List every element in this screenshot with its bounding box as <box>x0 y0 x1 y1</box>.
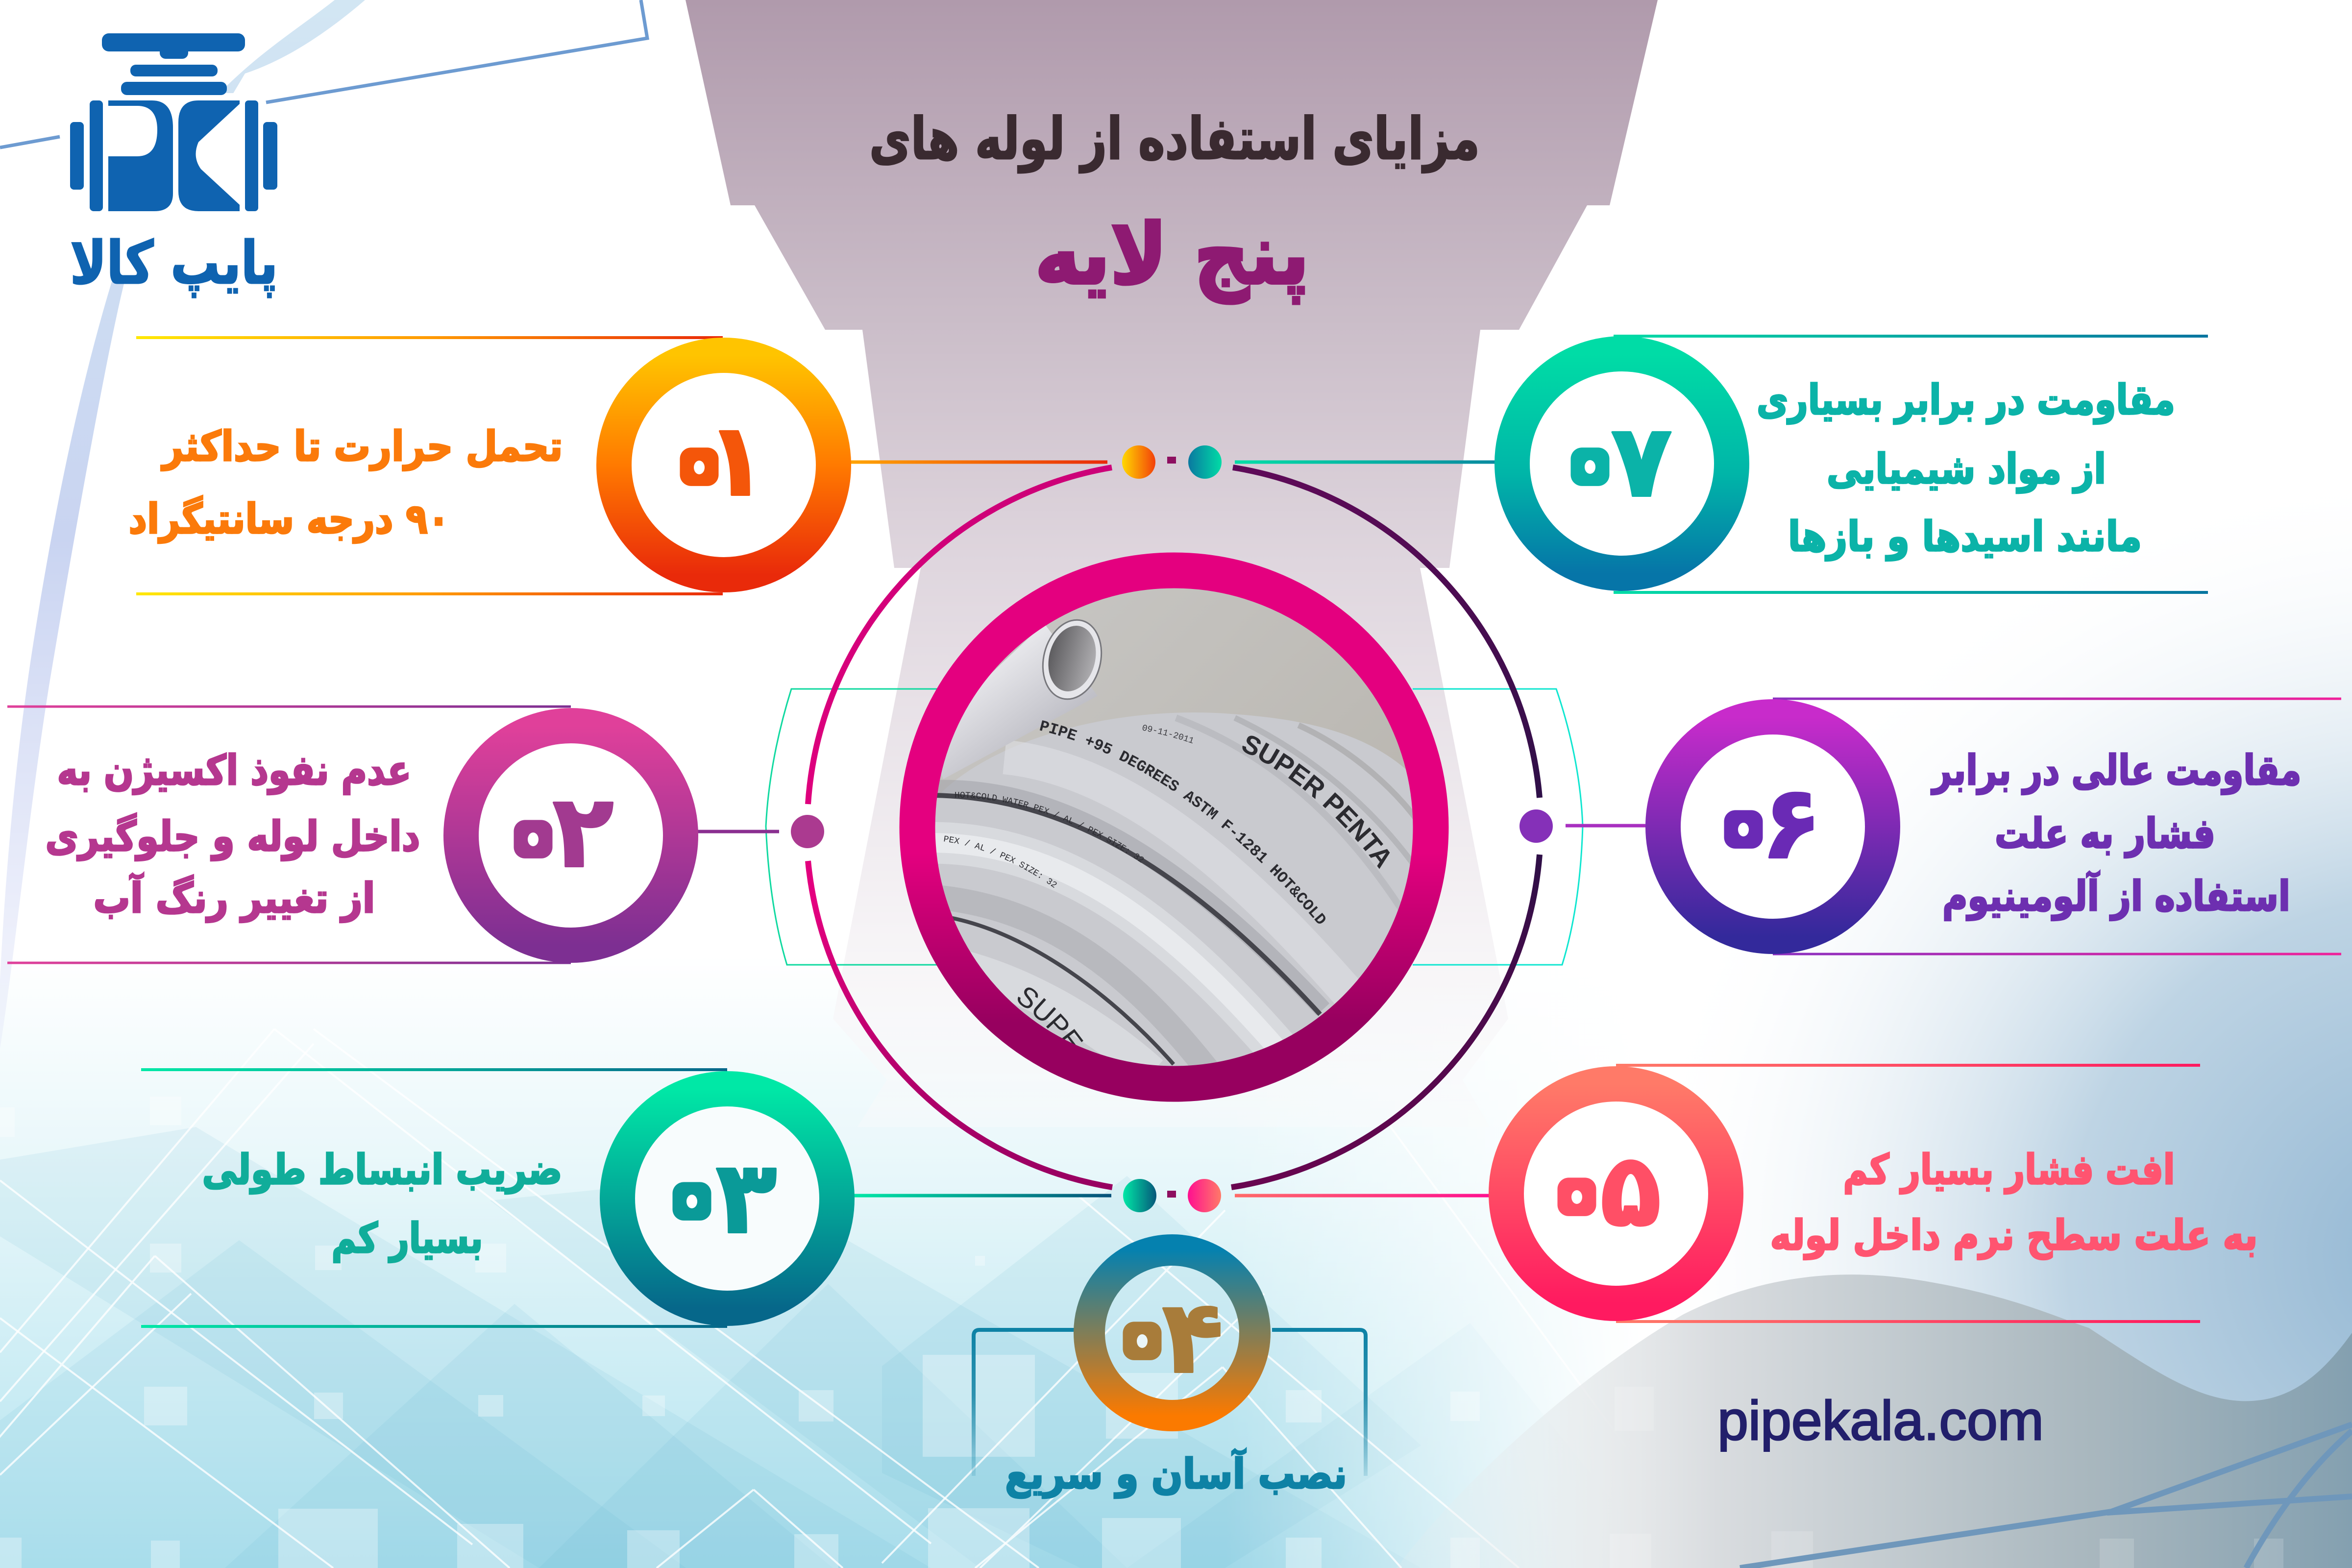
text 06: فشار به علت <box>1995 809 2215 858</box>
number 07: ۷ <box>1611 403 1672 520</box>
text 01 <box>129 422 563 543</box>
printing on pipes <box>944 720 1390 1045</box>
ring dots <box>791 445 1553 1212</box>
top-left lines <box>0 0 647 147</box>
panel: right blue glow <box>1494 368 2352 1568</box>
grey wave <box>1396 1274 2352 1568</box>
item 06 <box>1663 699 2341 954</box>
text 05: افت فشار بسیار کم <box>1843 1146 2175 1194</box>
printing on pipes: 09-11-2011 <box>1143 725 1193 744</box>
number 02: ۲ <box>552 774 614 890</box>
number 07: ۰ <box>1562 407 1618 515</box>
central photo: pipe coil <box>935 588 1413 1066</box>
text 07: از مواد شیمیایی <box>1827 445 2106 493</box>
printing on pipes: SUPER PENTA <box>1243 736 1390 869</box>
text 05: به علت سطح نرم داخل لوله <box>1770 1211 2258 1260</box>
text 06 <box>1931 746 2301 921</box>
logo white backing <box>61 93 265 282</box>
pink photo ring <box>917 570 1431 1084</box>
logo <box>70 33 278 297</box>
number 02 <box>505 774 614 890</box>
number 05 <box>1548 1132 1662 1249</box>
number 03 <box>663 1140 777 1256</box>
blue lines bottom right <box>1740 1424 2352 1568</box>
text 04: نصب آسان و سریع <box>1005 1448 1347 1498</box>
text 02 <box>45 746 420 923</box>
text 03: بسیار کم <box>331 1214 483 1263</box>
printing on pipes: HOT&COLD WATER PEX / AL / PEX SIZE: 32 <box>955 792 1144 863</box>
number 04: ۰ <box>1114 1281 1171 1389</box>
number 05: ۰ <box>1548 1137 1605 1245</box>
text 02: عدم نفوذ اکسیژن به <box>57 746 412 795</box>
printing on pipes: PEX / AL / PEX SIZE: 32 <box>944 836 1056 888</box>
item 03 <box>141 1070 837 1326</box>
top-left arc <box>0 0 365 1049</box>
text 01: ۹۰ درجه سانتیگراد <box>129 495 450 543</box>
text 03 <box>202 1146 563 1263</box>
funnel <box>686 0 1658 1127</box>
bracket 04 <box>974 1330 1366 1476</box>
short pipe <box>941 619 1102 779</box>
item 04 <box>974 1250 1366 1498</box>
item 02 <box>7 707 681 963</box>
item 05 <box>1506 1065 2258 1322</box>
printing on pipes: PIPE +95 DEGREES ASTM F-1281 HOT&COLD <box>1040 720 1325 924</box>
number 01: ۰ <box>671 407 728 515</box>
text 07 <box>1757 376 2175 561</box>
number 04 <box>1114 1279 1224 1396</box>
text 02: از تغییر رنگ آب <box>93 873 375 923</box>
number 06 <box>1715 765 1822 882</box>
number 06: ۶ <box>1761 765 1822 882</box>
number 02: ۰ <box>505 779 562 887</box>
number 04: ۴ <box>1162 1279 1224 1396</box>
outer ring <box>808 467 1540 1187</box>
title: مزایای استفاده از لوله های <box>869 105 1480 173</box>
number 06: ۰ <box>1715 769 1772 878</box>
text 02: داخل لوله و جلوگیری <box>45 812 420 861</box>
logo wordmark: پایپ کالا <box>70 229 278 297</box>
text 03: ضریب انبساط طولی <box>202 1146 563 1194</box>
text 06: استفاده از آلومینیوم <box>1942 871 2290 921</box>
number 03: ۳ <box>715 1140 777 1256</box>
title highlight: پنج لایه <box>1035 206 1309 304</box>
number 07 <box>1562 403 1672 520</box>
number 03: ۰ <box>663 1141 720 1250</box>
panel: left blue background <box>0 956 1715 1568</box>
title <box>869 105 1480 304</box>
number 05: ۵ <box>1600 1132 1662 1249</box>
item 07 <box>1512 336 2208 592</box>
pale squares on wave <box>1610 1387 2283 1568</box>
connectors <box>697 462 1645 1196</box>
text 07: مانند اسیدها و بازها <box>1788 513 2142 561</box>
text 05 <box>1770 1146 2258 1260</box>
text 01: تحمل حرارت تا حداکثر <box>161 422 563 471</box>
item 01 <box>129 338 833 594</box>
website url: pipekala.com <box>1717 1390 2044 1451</box>
text 07: مقاومت در برابر بسیاری <box>1757 376 2175 424</box>
number 01: ۱ <box>706 402 767 519</box>
teal brackets behind photo <box>766 689 1583 965</box>
number 01 <box>671 402 767 519</box>
